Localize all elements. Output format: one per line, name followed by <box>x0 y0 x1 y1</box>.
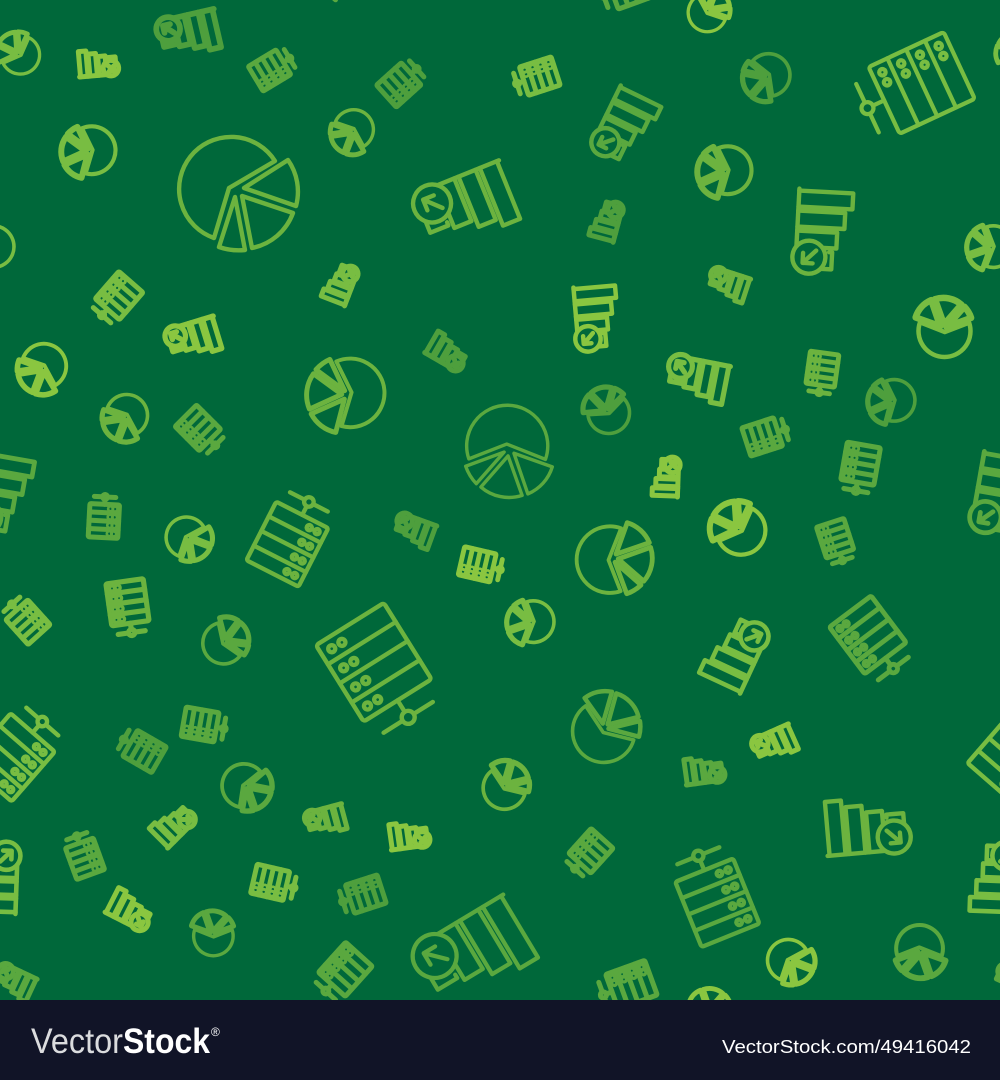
icon: pie chart <box>50 113 125 189</box>
icon: small server <box>251 864 299 903</box>
icon: bar chart with clock <box>967 451 1000 539</box>
icon: bar chart with clock <box>571 284 621 353</box>
icon: pie chart <box>16 343 67 396</box>
icon: pie chart <box>563 507 668 611</box>
icon: bar chart with clock <box>698 609 773 695</box>
icon: large bar chart with clock <box>407 157 522 254</box>
icon: bar chart with clock <box>388 819 431 852</box>
icon: bar chart with clock <box>0 841 21 914</box>
icon: small server <box>742 415 792 456</box>
icon: small server <box>594 0 657 13</box>
icon: small server <box>106 579 151 638</box>
icon: pie chart <box>101 394 148 443</box>
icon: pie chart <box>680 979 740 1040</box>
icon: small server <box>311 0 372 5</box>
icon: small server <box>88 272 143 328</box>
icon: bar chart with clock <box>705 265 751 303</box>
icon: pie chart <box>197 611 255 670</box>
icon: bar chart with clock <box>303 802 348 838</box>
icon: pie chart <box>444 389 571 516</box>
icon: bar chart with clock <box>424 331 472 374</box>
icon: pie chart <box>165 516 213 562</box>
icon: pie chart <box>707 498 769 558</box>
icon: small server <box>114 725 166 773</box>
icon: pie chart <box>735 46 796 108</box>
icon: pie chart <box>182 902 244 964</box>
icon: server <box>830 596 917 688</box>
icon: pie chart <box>575 379 638 441</box>
icon: pie chart <box>687 0 731 33</box>
icon: server <box>0 699 67 801</box>
icon: small server <box>594 960 657 1013</box>
icon: pie chart <box>903 286 985 367</box>
icon: small server <box>62 829 105 879</box>
icon: bar chart with clock <box>663 352 731 405</box>
icon: small server <box>458 547 506 584</box>
icon: bar chart with clock <box>587 84 662 170</box>
icon: small server <box>510 57 560 98</box>
icon: pie chart <box>0 214 22 279</box>
icon: bar chart with clock <box>154 6 222 60</box>
icon: server <box>968 699 1000 801</box>
icon: bar chart with clock <box>823 795 912 859</box>
icon: bar chart with clock <box>589 197 625 243</box>
icon: pie chart <box>858 368 924 434</box>
icon: server <box>668 839 759 947</box>
icon: bar chart with clock <box>321 260 360 306</box>
icon: bar chart with clock <box>792 188 853 276</box>
icon: small server <box>88 494 120 538</box>
icon: small server <box>336 875 386 916</box>
icon: pie chart <box>329 109 374 156</box>
icon: large pie chart <box>179 137 298 250</box>
icon: bar chart with clock <box>749 722 799 766</box>
icon: bar chart with clock <box>391 511 437 550</box>
icon: pie chart <box>686 133 761 209</box>
icon: bar chart with clock <box>77 48 119 79</box>
icon: large server <box>316 603 446 744</box>
icon: bar chart with clock <box>0 961 38 1002</box>
icon: small server <box>816 518 857 567</box>
icon: bar chart with clock <box>162 314 223 363</box>
icon: small server <box>175 405 228 458</box>
icon: bar chart with clock <box>970 841 1000 914</box>
icon: pie chart <box>290 340 399 448</box>
icon: bar chart with clock <box>104 887 157 934</box>
icon: small server <box>377 56 428 107</box>
icon: bar chart with clock <box>683 754 726 787</box>
icon: small server <box>311 942 372 1005</box>
icon: large server <box>847 32 975 144</box>
icon: pie chart <box>767 939 816 986</box>
icon: pie chart <box>571 689 642 764</box>
icon: bar chart with clock <box>0 451 35 539</box>
icon: small server <box>839 442 880 496</box>
image id url: VectorStock.com/49416042 <box>722 1036 971 1057</box>
icon: small server <box>562 829 613 880</box>
icon: large bar chart with clock <box>405 891 540 1014</box>
icon: server <box>246 484 337 587</box>
icon: bar chart with clock <box>652 456 680 497</box>
icon: pie chart <box>957 214 1000 279</box>
icon: small server <box>0 593 50 644</box>
icon: pie chart <box>482 759 531 810</box>
icon: pie chart <box>219 760 275 814</box>
icon: pie chart <box>0 29 42 76</box>
icon: pie chart <box>497 589 562 654</box>
icon: small server <box>805 351 839 397</box>
icon: bar chart with clock <box>990 961 1000 1002</box>
registered mark: ® <box>211 1025 220 1039</box>
footer bar <box>0 1000 1000 1080</box>
icon: small server <box>181 707 229 744</box>
icon: pie chart <box>883 916 956 989</box>
icon: pie chart <box>993 29 1000 76</box>
icon: small server <box>248 45 299 91</box>
icon: bar chart with clock <box>149 799 199 849</box>
logo wordmark: VectorStock <box>31 1022 210 1061</box>
